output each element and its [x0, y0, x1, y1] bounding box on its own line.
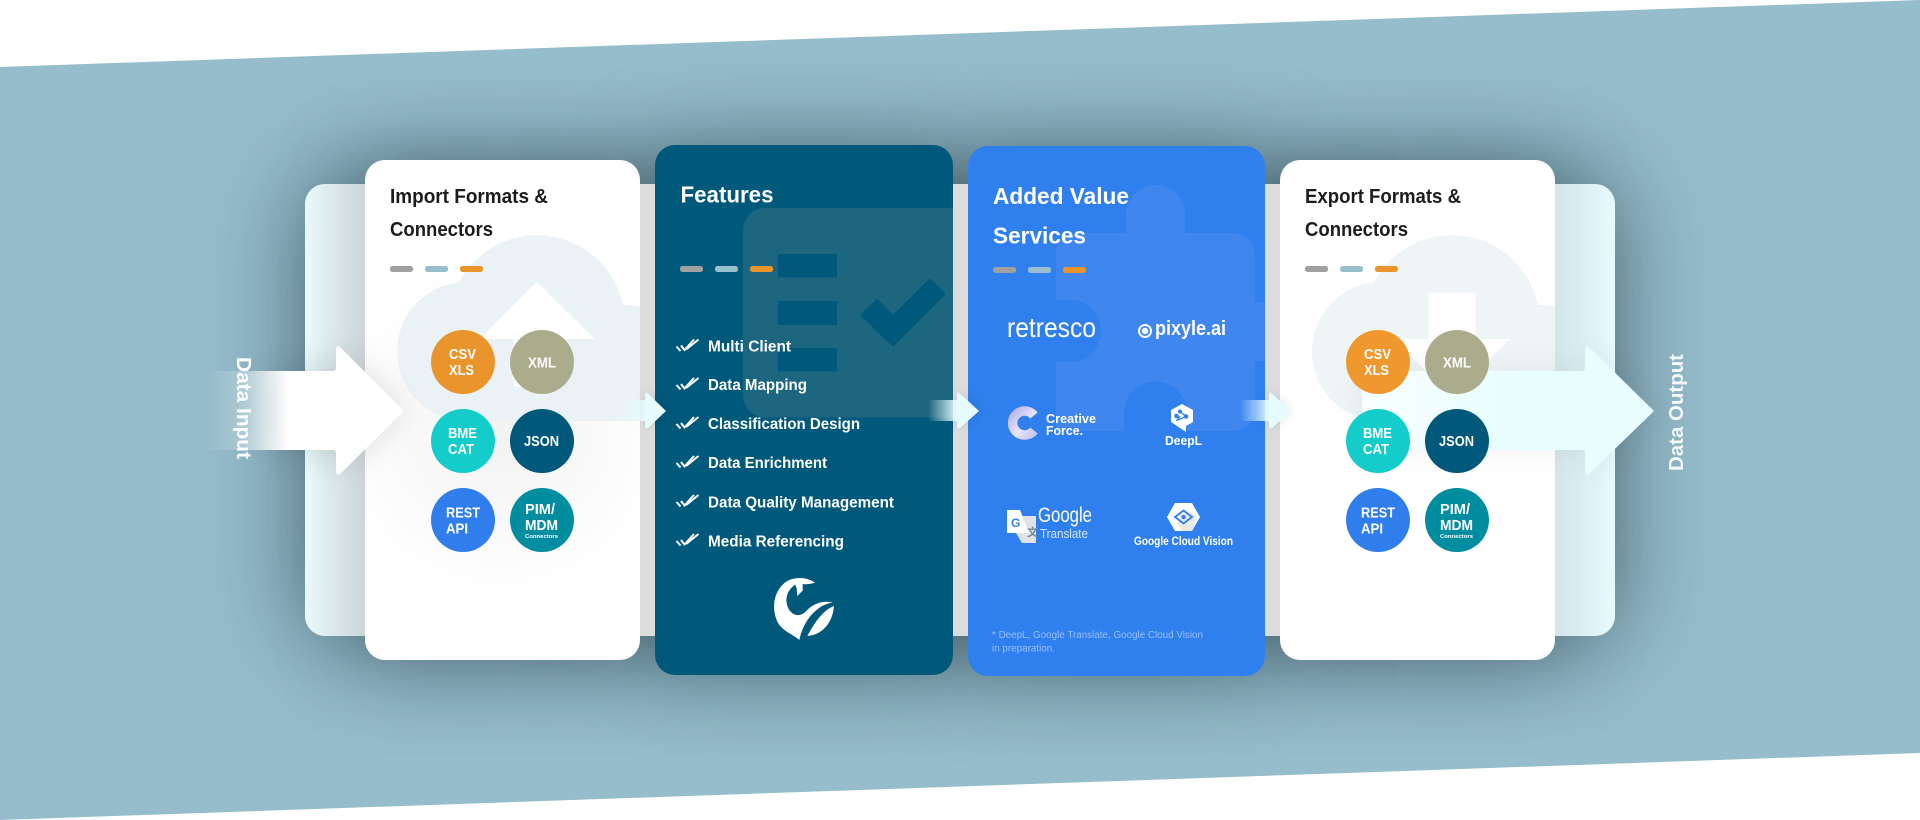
format badges: export: XML	[1443, 356, 1471, 372]
format badges: import: API	[446, 522, 468, 538]
format badges: import: PIM/	[525, 502, 555, 518]
panel: features	[655, 145, 953, 675]
icon: cloud download watermark	[1312, 236, 1555, 416]
heading: added value services	[993, 183, 1129, 248]
heading: export	[1305, 186, 1461, 241]
logo: deepl: DeepL	[1165, 433, 1202, 448]
panel: export formats and connectors	[1280, 160, 1555, 660]
panel: import formats and connectors	[365, 160, 640, 660]
arrow: import to features	[617, 392, 666, 429]
format badges: export: CSV	[1364, 347, 1391, 363]
icon: cloud upload watermark	[397, 235, 640, 421]
heading: added value services: Added Value	[993, 183, 1129, 209]
format badges: export: Connectors	[1440, 534, 1473, 540]
logo: google translate: Google	[1038, 504, 1092, 527]
feature list: Media Referencing	[708, 534, 844, 550]
format badges: export	[1346, 330, 1489, 552]
arrow: services to export	[1240, 392, 1291, 429]
logo: retresco: retresco	[1007, 312, 1096, 343]
label: data input: Data Input	[232, 357, 254, 459]
heading: export: Connectors	[1305, 219, 1408, 241]
heading: export: Export Formats &	[1305, 186, 1461, 208]
format badges: import: CSV	[449, 347, 476, 363]
feature list: Data Enrichment	[708, 455, 828, 472]
panel: added value services	[968, 146, 1270, 676]
label: data output: Data Output	[1666, 354, 1688, 471]
logo: pixyle.ai: pixyle.ai	[1155, 318, 1226, 340]
feature list: Data Mapping	[708, 377, 807, 394]
dashes: added value	[993, 267, 1086, 273]
format badges: import: XLS	[449, 363, 474, 379]
format badges: export: CAT	[1363, 442, 1389, 458]
icon: checklist watermark	[743, 208, 953, 418]
format badges: export: JSON	[1439, 434, 1474, 450]
heading: import: Connectors	[390, 219, 493, 241]
format badges: export: API	[1361, 522, 1383, 538]
heading: import: Import Formats &	[390, 186, 548, 208]
footnote: * DeepL, Google Translate, Google Cloud Vision	[992, 630, 1203, 641]
dashes: import	[390, 266, 483, 272]
heading: added value services: Services	[993, 222, 1086, 248]
format badges: import: XML	[528, 356, 556, 372]
logo: creative force: Creative	[1046, 411, 1096, 426]
format badges: import: JSON	[524, 434, 559, 450]
format badges: import	[431, 330, 574, 552]
format badges: export: PIM/	[1440, 502, 1470, 518]
logo: google translate: Translate	[1040, 526, 1088, 541]
arrow: features to services	[928, 392, 979, 429]
back panel	[305, 184, 1615, 636]
footnote	[992, 630, 1203, 654]
format badges: export: XLS	[1364, 363, 1389, 379]
dashes: export	[1305, 266, 1398, 272]
arrow: data output	[1362, 345, 1654, 476]
logo: creative force	[1013, 411, 1096, 438]
format badges: import: REST	[446, 506, 480, 522]
format badges: import: CAT	[448, 442, 474, 458]
feature list: Multi Client	[708, 338, 792, 356]
heading: import	[390, 186, 548, 241]
format badges: import: MDM	[525, 518, 558, 534]
logo: google translate	[1007, 504, 1092, 543]
icon: puzzle watermark	[1056, 185, 1270, 431]
feature list	[676, 338, 895, 550]
logo: creative force: Force.	[1046, 423, 1083, 438]
icon: whale logo	[774, 578, 834, 640]
logo: google cloud vision: Google Cloud Vision	[1134, 536, 1233, 548]
footnote: in preparation.	[992, 644, 1055, 654]
logo: google cloud vision	[1134, 503, 1233, 548]
logo: google translate: 文	[1027, 525, 1038, 539]
dashes: features	[680, 266, 773, 272]
logo: deepl	[1165, 404, 1202, 448]
format badges: export: MDM	[1440, 518, 1473, 534]
format badges: export: BME	[1363, 426, 1392, 442]
heading: features: Features	[680, 182, 774, 208]
feature list: Classification Design	[708, 416, 860, 433]
logo: google translate: G	[1011, 516, 1020, 530]
format badges: import: Connectors	[525, 534, 558, 540]
format badges: export: REST	[1361, 506, 1395, 522]
format badges: import: BME	[448, 426, 477, 442]
arrow: data input	[205, 345, 404, 476]
feature list: Data Quality Management	[708, 494, 895, 512]
